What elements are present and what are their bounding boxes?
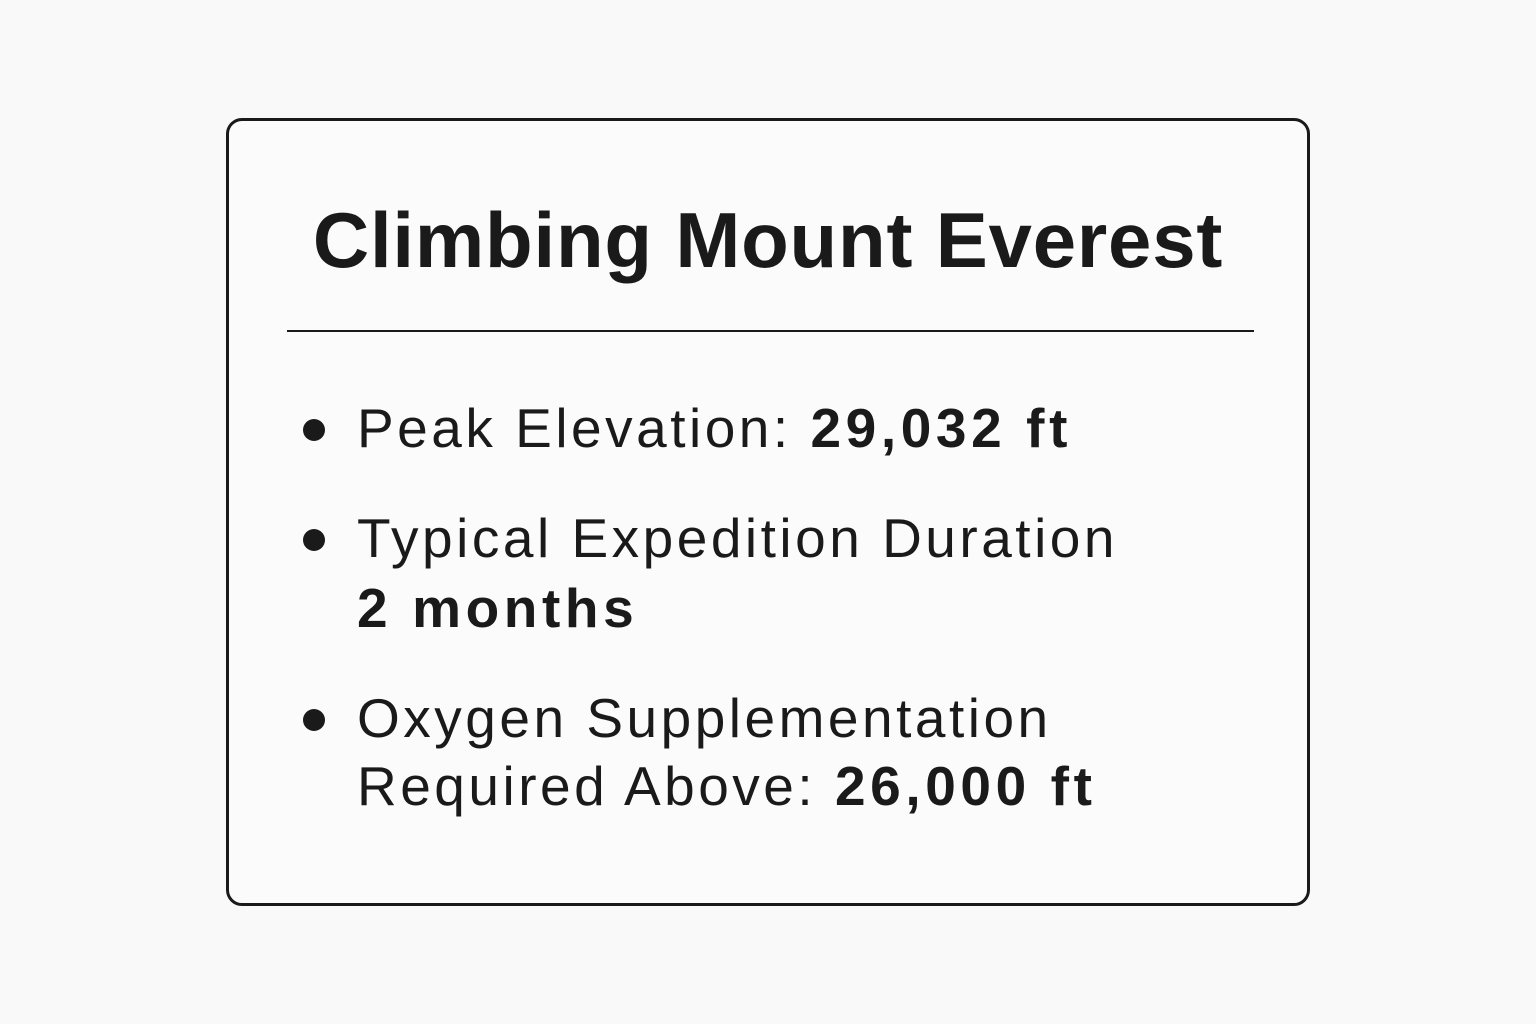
bullet: oxygen supplementation: Oxygen Supplementation [357,687,1052,749]
bullet: expedition duration: Typical Expedition Duration [357,507,1118,569]
card panel [226,118,1310,906]
bullet: peak elevation: Peak Elevation: 29,032 ft [357,397,1072,459]
bullet: oxygen supplementation [303,687,1096,817]
bullet: expedition duration: 2 months [357,577,638,639]
bullet: expedition duration [303,507,1118,639]
bullet: oxygen supplementation: Required Above: 26,000 ft [357,755,1096,817]
title: Climbing Mount Everest [313,196,1223,284]
